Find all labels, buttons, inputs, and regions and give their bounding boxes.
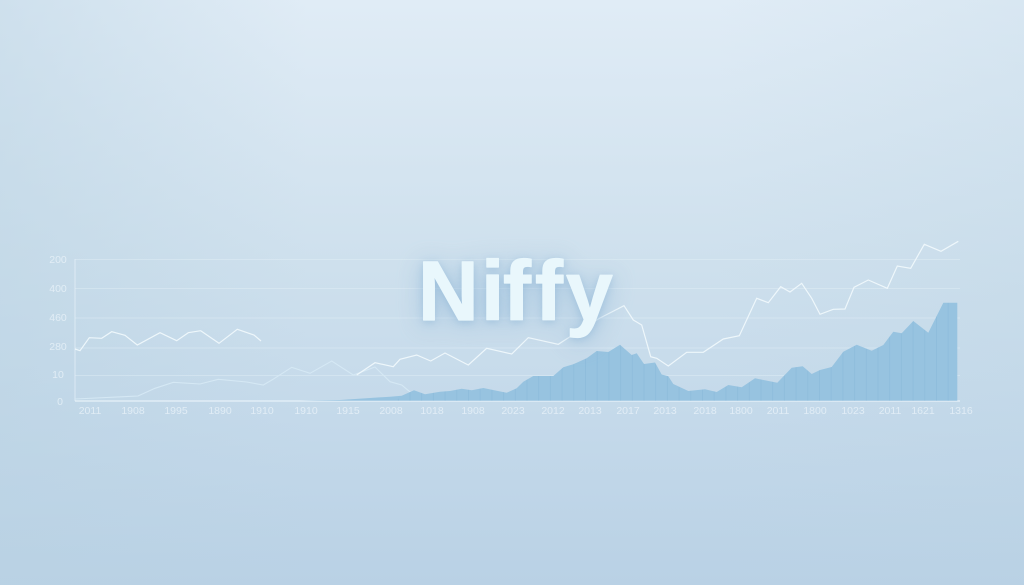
x-axis labels: 2023: [501, 405, 525, 417]
right white line: [357, 241, 958, 375]
left white line: [75, 329, 261, 351]
y-axis labels: 0: [57, 396, 63, 408]
area series: [300, 303, 957, 401]
x-axis labels: 1621: [911, 405, 935, 417]
x-axis labels: 1890: [208, 405, 232, 417]
faint background line: [75, 361, 412, 399]
x-axis labels: 1316: [949, 405, 973, 417]
title: Niffy: [418, 244, 613, 338]
x-axis labels: 2013: [578, 405, 602, 417]
x-axis labels: 1910: [294, 405, 318, 417]
x-axis labels: [79, 405, 973, 417]
x-axis labels: 1800: [729, 405, 753, 417]
x-axis labels: 2011: [767, 405, 789, 417]
x-axis labels: 1915: [336, 405, 360, 417]
y-axis labels: 460: [49, 312, 67, 324]
x-axis labels: 2012: [541, 405, 565, 417]
x-axis labels: 1995: [164, 405, 188, 417]
x-axis labels: 2011: [879, 405, 901, 417]
x-axis labels: 1800: [803, 405, 827, 417]
y-axis labels: [49, 254, 67, 408]
x-axis labels: 2013: [653, 405, 677, 417]
y-axis labels: 280: [49, 341, 67, 353]
y-axis labels: 10: [52, 369, 64, 381]
chart grid lines and axes: [75, 259, 960, 401]
x-axis labels: 1018: [420, 405, 444, 417]
chart: [49, 241, 973, 417]
x-axis labels: 2017: [616, 405, 640, 417]
x-axis labels: 1023: [841, 405, 865, 417]
y-axis labels: 200: [49, 254, 67, 266]
x-axis labels: 2011: [79, 405, 101, 417]
x-axis labels: 1908: [461, 405, 485, 417]
y-axis labels: 400: [49, 283, 67, 295]
x-axis labels: 2018: [693, 405, 717, 417]
x-axis labels: 1908: [121, 405, 145, 417]
x-axis labels: 1910: [250, 405, 274, 417]
x-axis labels: 2008: [379, 405, 403, 417]
